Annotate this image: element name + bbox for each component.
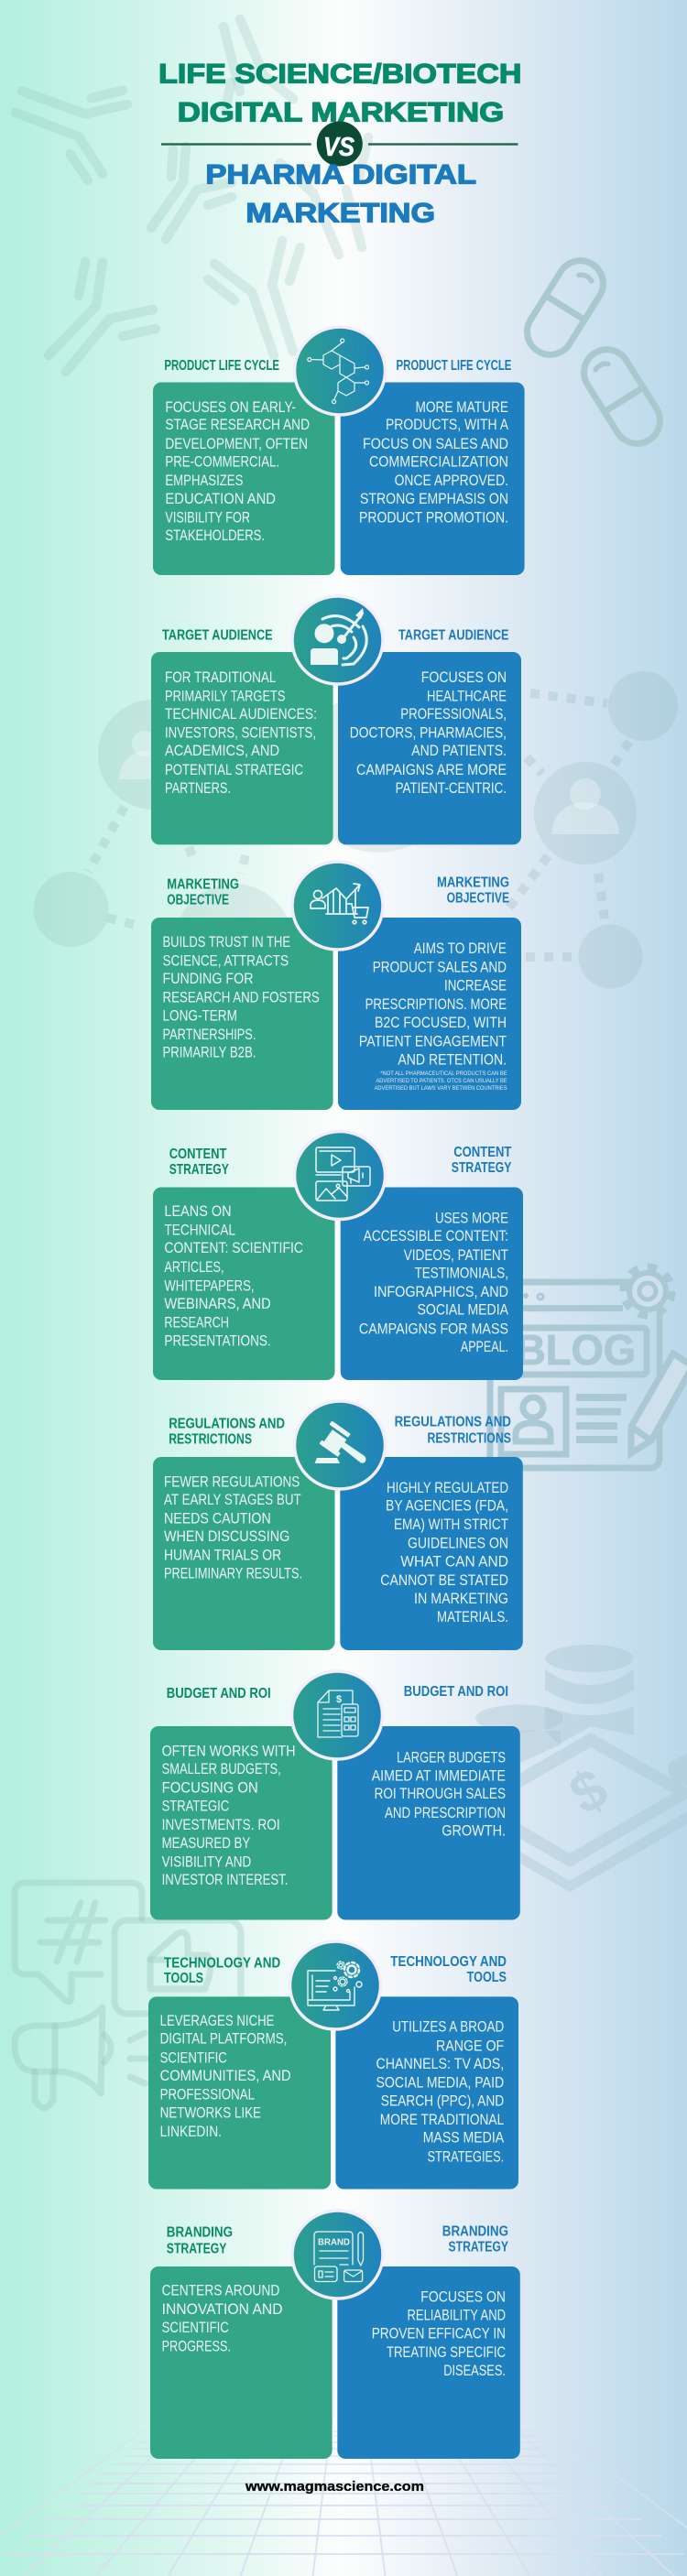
text: pharma regulations: HIGHLY REGULATED — [387, 1479, 508, 1496]
heading: biotech marketing objective: OBJECTIVE — [167, 892, 229, 908]
text: biotech target audience: PARTNERS. — [165, 779, 231, 797]
panel: budget and roi — [150, 1671, 520, 1919]
title — [158, 59, 521, 229]
icon: brand document — [292, 2211, 383, 2299]
divider left — [161, 143, 311, 146]
heading: pharma branding — [442, 2224, 508, 2255]
heading: biotech marketing objective: MARKETING — [167, 877, 239, 893]
text: biotech branding: CENTERS AROUND — [162, 2282, 279, 2299]
card: biotech — [153, 1457, 335, 1650]
text: pharma branding — [372, 2288, 506, 2379]
title: life science line two: DIGITAL MARKETING — [178, 97, 504, 127]
text: pharma regulations: WHAT CAN AND — [400, 1553, 508, 1571]
text: biotech budget: INVESTOR INTEREST. — [162, 1871, 288, 1888]
text: pharma technology: STRATEGIES. — [427, 2147, 504, 2165]
panel: branding strategy — [150, 2211, 520, 2459]
text: biotech product life cycle: DEVELOPMENT, OFTEN — [165, 435, 308, 452]
text: biotech technology — [160, 2012, 291, 2140]
text: biotech content strategy: WEBINARS, AND — [164, 1295, 271, 1312]
text: pharma marketing objective: AND RETENTION. — [398, 1050, 507, 1068]
heading: biotech branding — [167, 2225, 233, 2256]
text: biotech content strategy — [164, 1202, 303, 1350]
text: biotech marketing objective: SCIENCE, ATTRACTS — [163, 952, 289, 969]
text: pharma regulations: CANNOT BE STATED — [380, 1571, 508, 1589]
heading: pharma regulations: RESTRICTIONS — [427, 1430, 511, 1447]
background: antibody watermarks — [16, 19, 368, 372]
text: biotech technology: SCIENTIFIC — [160, 2049, 227, 2066]
text: pharma marketing objective: PRODUCT SALES AND — [373, 959, 507, 976]
heading: biotech marketing objective — [167, 877, 239, 908]
text: biotech target audience: FOR TRADITIONAL — [165, 668, 276, 686]
heading: pharma content strategy: STRATEGY — [452, 1160, 512, 1176]
text: pharma budget — [372, 1748, 506, 1840]
card: biotech — [148, 1996, 331, 2189]
text: pharma target audience: AND PATIENTS. — [411, 742, 507, 759]
text: biotech budget: SMALLER BUDGETS, — [162, 1760, 281, 1777]
text: pharma branding: DISEASES. — [443, 2362, 506, 2379]
text: biotech budget: STRATEGIC — [162, 1798, 229, 1815]
heading: biotech technology: TECHNOLOGY AND — [164, 1955, 280, 1971]
text: pharma budget: GROWTH. — [442, 1822, 506, 1840]
heading: biotech technology: TOOLS — [164, 1971, 203, 1986]
heading: biotech regulations: RESTRICTIONS — [169, 1431, 252, 1447]
text: pharma content strategy: CAMPAIGNS FOR MASS — [359, 1321, 508, 1337]
card: pharma — [338, 652, 521, 844]
text: pharma regulations: MATERIALS. — [437, 1608, 508, 1625]
text: pharma content strategy: APPEAL. — [461, 1338, 508, 1355]
website url: www.magmascience.com — [245, 2480, 424, 2494]
text: biotech content strategy: RESEARCH — [164, 1314, 229, 1331]
background: blog icon — [490, 1267, 687, 1468]
icon: media content — [295, 1132, 385, 1220]
card: pharma — [335, 1996, 518, 2189]
text: pharma marketing objective: AIMS TO DRIVE — [414, 940, 507, 957]
icon: gavel — [295, 1401, 385, 1489]
text: biotech regulations: AT EARLY STAGES BUT — [164, 1491, 301, 1508]
text: pharma technology: SOCIAL MEDIA, PAID — [376, 2073, 504, 2092]
card: pharma — [338, 918, 521, 1110]
text: biotech branding — [162, 2282, 283, 2354]
text: biotech regulations: HUMAN TRIALS OR — [164, 1547, 281, 1564]
text: biotech technology: NETWORKS LIKE — [160, 2103, 261, 2121]
text: biotech content strategy: WHITEPAPERS, — [164, 1277, 255, 1294]
text: biotech target audience: ACADEMICS, AND — [165, 742, 279, 759]
text: biotech budget: OFTEN WORKS WITH — [162, 1742, 295, 1760]
footnote: *NOT ALL PHARMACEUTICAL PRODUCTS CAN BE — [380, 1071, 507, 1077]
heading: pharma marketing objective — [437, 875, 509, 907]
text: biotech budget: MEASURED BY — [162, 1834, 250, 1852]
text: biotech marketing objective: RESEARCH AND FOSTERS — [163, 988, 320, 1005]
background: dollar sign: $ — [560, 1756, 618, 1827]
versus badge: VS — [323, 133, 355, 162]
card: pharma — [341, 1187, 523, 1380]
text: pharma branding: TREATING SPECIFIC — [387, 2343, 506, 2361]
heading: biotech branding: STRATEGY — [167, 2241, 227, 2256]
text: biotech product life cycle: EDUCATION AND — [165, 490, 276, 507]
text: pharma regulations: IN MARKETING — [414, 1590, 508, 1607]
heading: biotech regulations — [169, 1416, 285, 1447]
text: biotech regulations: FEWER REGULATIONS — [164, 1473, 300, 1490]
text: pharma regulations — [380, 1479, 508, 1625]
card: biotech — [151, 918, 333, 1110]
panel: marketing objective — [151, 862, 521, 1110]
text: pharma regulations: GUIDELINES ON — [408, 1535, 508, 1552]
text: pharma target audience — [350, 668, 507, 797]
heading: pharma technology — [390, 1954, 507, 1985]
icon: molecule — [295, 327, 385, 415]
card: pharma — [341, 383, 525, 575]
text: biotech branding: SCIENTIFIC — [162, 2319, 229, 2336]
text: biotech regulations — [164, 1473, 302, 1581]
text: pharma target audience: HEALTHCARE — [427, 687, 507, 705]
icon: brand document: BRAND — [318, 2238, 350, 2248]
text: pharma content strategy: INFOGRAPHICS, AND — [374, 1283, 508, 1300]
text: pharma marketing objective: PATIENT ENGAGEMENT — [359, 1033, 507, 1049]
text: pharma marketing objective: B2C FOCUSED, WITH — [375, 1014, 507, 1031]
text: pharma content strategy — [359, 1210, 509, 1355]
text: biotech marketing objective: PRIMARILY B2B. — [163, 1044, 256, 1061]
background: people network — [33, 671, 678, 1003]
heading: pharma budget: BUDGET AND ROI — [404, 1684, 508, 1700]
versus badge — [317, 121, 363, 167]
text: pharma target audience: PATIENT-CENTRIC. — [396, 779, 507, 797]
text: biotech marketing objective — [163, 933, 320, 1061]
text: pharma budget: LARGER BUDGETS — [397, 1748, 506, 1766]
text: pharma technology: CHANNELS: TV ADS, — [376, 2055, 504, 2072]
text: biotech technology: DIGITAL PLATFORMS, — [160, 2030, 287, 2048]
panel: product life cycle — [153, 327, 525, 575]
background: social media icons — [15, 1883, 241, 2108]
text: biotech content strategy: TECHNICAL — [164, 1222, 235, 1239]
text: pharma marketing objective — [359, 940, 507, 1068]
text: pharma content strategy: SOCIAL MEDIA — [418, 1300, 509, 1319]
text: biotech budget: FOCUSING ON — [162, 1779, 258, 1797]
text: pharma budget: AND PRESCRIPTION — [385, 1804, 506, 1821]
title: pharma line two: MARKETING — [245, 198, 435, 229]
text: biotech regulations: WHEN DISCUSSING — [164, 1527, 289, 1545]
text: biotech budget — [162, 1742, 295, 1888]
heading: biotech target audience: TARGET AUDIENCE — [162, 628, 273, 643]
icon: invoice and calculator: $ — [336, 1694, 342, 1705]
text: pharma technology: RANGE OF — [436, 2037, 504, 2054]
text: biotech technology: COMMUNITIES, AND — [160, 2067, 291, 2084]
text: pharma product life cycle: COMMERCIALIZATION — [369, 452, 508, 471]
text: biotech content strategy: PRESENTATIONS. — [164, 1331, 271, 1350]
text: biotech technology: LINKEDIN. — [160, 2123, 222, 2140]
divider right — [368, 143, 518, 146]
heading: pharma target audience: TARGET AUDIENCE — [398, 628, 509, 643]
heading: pharma technology: TOOLS — [467, 1970, 507, 1985]
text: biotech content strategy: ARTICLES, — [164, 1258, 224, 1276]
card: biotech — [153, 1187, 335, 1380]
text: pharma branding: RELIABILITY AND — [407, 2307, 506, 2324]
text: pharma content strategy: ACCESSIBLE CONTENT: — [364, 1227, 508, 1245]
footnote — [375, 1071, 507, 1092]
heading: biotech content strategy: STRATEGY — [169, 1162, 229, 1178]
text: biotech marketing objective: BUILDS TRUST IN THE — [163, 933, 290, 951]
text: pharma budget: AIMED AT IMMEDIATE — [372, 1767, 506, 1785]
text: pharma product life cycle — [359, 398, 509, 526]
heading: pharma regulations — [395, 1414, 511, 1447]
heading: pharma marketing objective: OBJECTIVE — [447, 891, 509, 907]
heading: pharma regulations: REGULATIONS AND — [395, 1414, 511, 1430]
text: biotech technology: LEVERAGES NICHE — [160, 2012, 275, 2029]
text: pharma product life cycle: ONCE APPROVED. — [395, 472, 508, 489]
text: pharma branding: FOCUSES ON — [420, 2288, 506, 2305]
heading: biotech budget: BUDGET AND ROI — [167, 1686, 271, 1701]
card: pharma — [337, 1726, 520, 1919]
background: coins and money — [475, 1645, 687, 1892]
text: biotech target audience: PRIMARILY TARGETS — [165, 687, 286, 705]
icon: monitor and gears — [289, 1941, 381, 2029]
text: pharma product life cycle: PRODUCT PROMOTION. — [359, 509, 508, 526]
text: biotech content strategy: LEANS ON — [164, 1202, 232, 1220]
footnote: ADVERTISED TO PATIENTS. OTCS CAN USUALLY BE — [376, 1078, 507, 1084]
text: biotech marketing objective: LONG-TERM — [163, 1007, 237, 1024]
background: perspective grid — [0, 2418, 687, 2576]
card: pharma — [340, 1457, 523, 1650]
card: pharma — [337, 2266, 520, 2459]
text: biotech marketing objective: FUNDING FOR — [163, 970, 254, 987]
text: pharma content strategy: VIDEOS, PATIENT — [404, 1246, 508, 1264]
heading: biotech regulations: REGULATIONS AND — [169, 1416, 285, 1432]
icon: invoice and calculator — [291, 1671, 383, 1759]
text: biotech target audience: INVESTORS, SCIENTISTS, — [165, 723, 316, 741]
text: pharma target audience: PROFESSIONALS, — [400, 705, 507, 723]
text: pharma product life cycle: FOCUS ON SALES AND — [363, 435, 508, 452]
text: biotech product life cycle: PRE-COMMERCIAL. — [165, 452, 279, 471]
text: pharma target audience: DOCTORS, PHARMACIES, — [350, 723, 507, 741]
text: biotech branding: PROGRESS. — [162, 2337, 231, 2354]
text: biotech target audience: POTENTIAL STRATEGIC — [165, 761, 303, 778]
heading: biotech branding: BRANDING — [167, 2225, 233, 2241]
text: pharma product life cycle: MORE MATURE — [416, 398, 508, 416]
heading: biotech technology — [164, 1955, 280, 1986]
heading: pharma marketing objective: MARKETING — [437, 875, 509, 891]
text: biotech regulations: PRELIMINARY RESULTS. — [164, 1564, 302, 1581]
text: pharma branding: PROVEN EFFICACY IN — [372, 2325, 506, 2342]
heading: pharma product life cycle: PRODUCT LIFE CYCLE — [396, 358, 512, 374]
card: biotech — [151, 652, 333, 844]
panel: technology and tools — [148, 1941, 518, 2189]
text: biotech marketing objective: PARTNERSHIPS. — [163, 1026, 256, 1043]
text: biotech product life cycle: STAGE RESEARCH AND — [165, 416, 310, 433]
text: pharma regulations: EMA) WITH STRICT — [394, 1516, 508, 1533]
text: biotech product life cycle: EMPHASIZES — [165, 472, 243, 489]
heading: pharma branding: STRATEGY — [449, 2239, 508, 2255]
background: capsule pills — [518, 252, 669, 452]
card: biotech — [150, 1726, 333, 1919]
icon: person and target — [292, 596, 383, 684]
panel: content strategy — [153, 1132, 523, 1380]
text: biotech product life cycle: VISIBILITY FOR — [165, 509, 250, 526]
text: biotech product life cycle: STAKEHOLDERS. — [165, 527, 265, 544]
text: biotech product life cycle — [165, 398, 310, 544]
text: biotech budget: VISIBILITY AND — [162, 1853, 251, 1870]
title: pharma line one: PHARMA DIGITAL — [205, 160, 476, 190]
card: biotech — [150, 2266, 333, 2459]
text: pharma regulations: BY AGENCIES (FDA, — [386, 1496, 508, 1514]
text: pharma technology: MORE TRADITIONAL — [380, 2111, 504, 2128]
text: pharma marketing objective: INCREASE — [444, 976, 507, 994]
heading: pharma branding: BRANDING — [442, 2224, 508, 2240]
panel: regulations and restrictions — [153, 1401, 523, 1650]
text: biotech content strategy: CONTENT: SCIENTIFIC — [164, 1239, 303, 1256]
text: pharma technology — [376, 2018, 505, 2165]
text: pharma target audience: CAMPAIGNS ARE MORE — [356, 761, 507, 778]
heading: biotech product life cycle: PRODUCT LIFE CYCLE — [164, 358, 279, 374]
background: blog icon: BLOG — [516, 1326, 636, 1374]
text: pharma technology: MASS MEDIA — [423, 2129, 505, 2147]
text: pharma target audience: FOCUSES ON — [421, 668, 507, 686]
icon: chart and cart — [292, 862, 383, 950]
text: pharma marketing objective: PRESCRIPTIONS. MORE — [365, 995, 507, 1013]
text: pharma technology: UTILIZES A BROAD — [392, 2018, 504, 2036]
panel: target audience — [151, 596, 521, 844]
text: biotech target audience: TECHNICAL AUDIENCES: — [165, 705, 317, 723]
text: pharma content strategy: USES MORE — [435, 1210, 508, 1227]
text: biotech regulations: NEEDS CAUTION — [164, 1509, 271, 1527]
heading: pharma content strategy: CONTENT — [453, 1145, 512, 1160]
text: pharma product life cycle: PRODUCTS, WITH A — [386, 416, 509, 433]
text: biotech target audience — [165, 668, 317, 797]
text: pharma technology: SEARCH (PPC), AND — [381, 2092, 504, 2109]
heading: pharma content strategy — [452, 1145, 512, 1176]
footnote: ADVERTISED BUT LAWS VARY BETWEN COUNTRIES — [375, 1085, 507, 1092]
title: life science line one: LIFE SCIENCE/BIOTECH — [158, 59, 521, 89]
text: biotech technology: PROFESSIONAL — [160, 2086, 255, 2103]
text: biotech product life cycle: FOCUSES ON EARLY- — [165, 398, 296, 416]
text: pharma content strategy: TESTIMONIALS, — [415, 1264, 508, 1281]
heading: biotech content strategy — [169, 1147, 229, 1178]
text: pharma product life cycle: STRONG EMPHASIS ON — [360, 490, 508, 507]
text: biotech budget: INVESTMENTS. ROI — [162, 1816, 280, 1833]
card: biotech — [153, 383, 335, 575]
text: pharma budget: ROI THROUGH SALES — [375, 1785, 506, 1802]
heading: biotech content strategy: CONTENT — [169, 1147, 227, 1162]
text: biotech branding: INNOVATION AND — [162, 2300, 283, 2318]
heading: pharma technology: TECHNOLOGY AND — [390, 1954, 507, 1970]
